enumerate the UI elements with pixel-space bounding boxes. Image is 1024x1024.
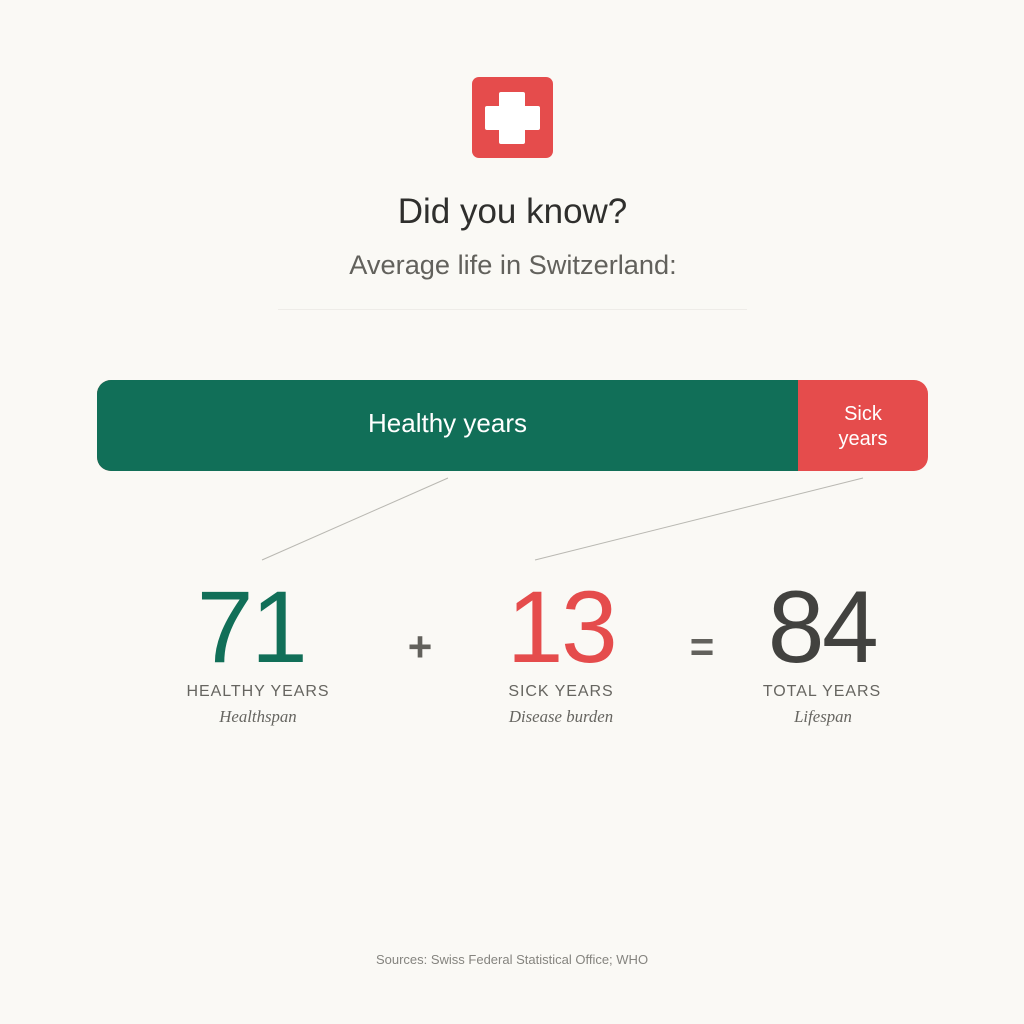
stat: sick years	[507, 570, 615, 726]
label: HEALTHY YEARS	[186, 683, 330, 700]
bar segment: healthy years	[97, 380, 798, 471]
stat: total years	[763, 570, 881, 726]
italic label: Healthspan	[219, 706, 297, 726]
sources: Sources: Swiss Federal Statistical Office; WHO	[376, 952, 648, 967]
stat: healthy years	[186, 570, 330, 726]
italic label: Disease burden	[509, 706, 613, 726]
number 71: 71	[197, 570, 305, 684]
title: Did you know?	[398, 192, 627, 230]
bar segment: sick years: years	[839, 428, 887, 450]
bar segment: healthy years: Healthy years	[368, 408, 527, 438]
icon: Swiss cross	[472, 77, 553, 158]
bar segment: sick years: Sick	[844, 402, 882, 424]
number 13: 13	[507, 570, 615, 684]
label: TOTAL YEARS	[763, 683, 881, 700]
label: SICK YEARS	[508, 683, 614, 700]
plus sign: +	[408, 623, 432, 670]
number 84: 84	[768, 570, 876, 684]
bar segment: sick years	[838, 402, 887, 450]
equals sign: =	[690, 623, 714, 670]
stacked bar	[97, 380, 928, 471]
italic label: Lifespan	[794, 706, 852, 726]
subtitle: Average life in Switzerland:	[349, 248, 677, 280]
